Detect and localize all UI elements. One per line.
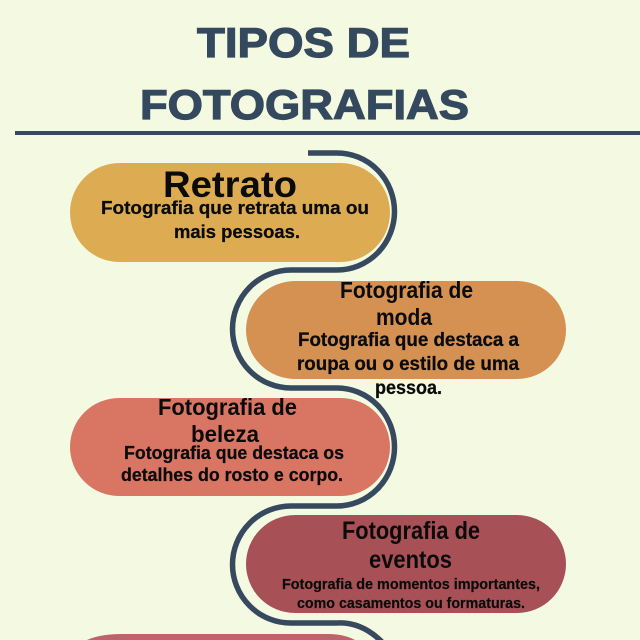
winding connector line — [232, 153, 394, 640]
pill: retrato — [70, 163, 390, 262]
heading: moda — [340, 277, 473, 330]
description: eventos — [282, 577, 540, 612]
panel: fotografia de moda — [246, 277, 566, 399]
description: beleza: detalhes do rosto e corpo. — [121, 465, 343, 485]
description: eventos: como casamentos ou formaturas. — [297, 596, 525, 612]
title: TIPOS DE — [197, 19, 410, 66]
pill: moda — [246, 281, 566, 379]
heading: eventos — [342, 517, 480, 574]
heading: beleza: beleza — [191, 421, 259, 447]
panel: fotografia de eventos — [246, 515, 566, 613]
description: beleza — [121, 443, 344, 485]
description: moda: Fotografia que destaca a — [298, 330, 519, 351]
pill: beleza — [70, 398, 390, 496]
panel: cropped fifth pill — [87, 634, 355, 640]
title underline — [15, 131, 640, 135]
heading: beleza — [158, 394, 297, 447]
panel: retrato — [70, 163, 390, 262]
pill: eventos — [246, 515, 566, 613]
heading: beleza: Fotografia de — [158, 394, 297, 420]
heading: retrato: Retrato — [163, 164, 297, 205]
description: beleza: Fotografia que destaca os — [124, 443, 344, 463]
description: moda: pessoa. — [375, 378, 442, 399]
heading: moda: Fotografia de — [340, 277, 473, 303]
description: eventos: Fotografia de momentos importantes, — [282, 577, 540, 593]
title: FOTOGRAFIAS — [140, 81, 469, 128]
heading: eventos: eventos — [369, 546, 452, 574]
description: retrato — [101, 197, 369, 242]
description: moda: roupa ou o estilo de uma — [297, 354, 519, 375]
title — [140, 19, 469, 128]
description: retrato: Fotografia que retrata uma ou — [101, 197, 369, 218]
panel: fotografia de beleza — [70, 394, 390, 496]
heading: moda: moda — [376, 304, 432, 330]
description: retrato: mais pessoas. — [174, 221, 300, 242]
heading: eventos: Fotografia de — [342, 517, 480, 545]
description: moda — [297, 330, 519, 399]
